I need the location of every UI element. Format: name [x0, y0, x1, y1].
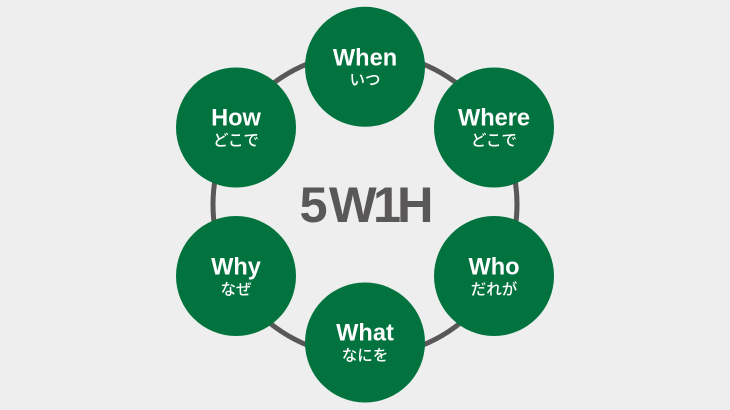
- node: Why: Why: [211, 254, 261, 280]
- node: What: なにを: [342, 346, 388, 364]
- node: What: [305, 282, 425, 402]
- node: Who: Who: [468, 254, 520, 280]
- node: Where: [434, 68, 554, 188]
- node: How: どこで: [213, 132, 259, 150]
- connecting ring: [213, 52, 517, 356]
- node: When: いつ: [349, 72, 381, 89]
- node: Who: だれが: [471, 280, 518, 298]
- node: When: [305, 7, 425, 127]
- node: Where: Where: [458, 106, 530, 132]
- node: How: [176, 68, 296, 188]
- node: Who: [434, 216, 554, 336]
- node: Why: なぜ: [220, 280, 252, 298]
- center title: 5W1H: [300, 176, 433, 233]
- node: How: How: [211, 106, 262, 132]
- node: Where: どこで: [471, 132, 517, 150]
- node: When: When: [333, 46, 397, 72]
- node: Why: [176, 216, 296, 336]
- node: What: What: [336, 321, 394, 347]
